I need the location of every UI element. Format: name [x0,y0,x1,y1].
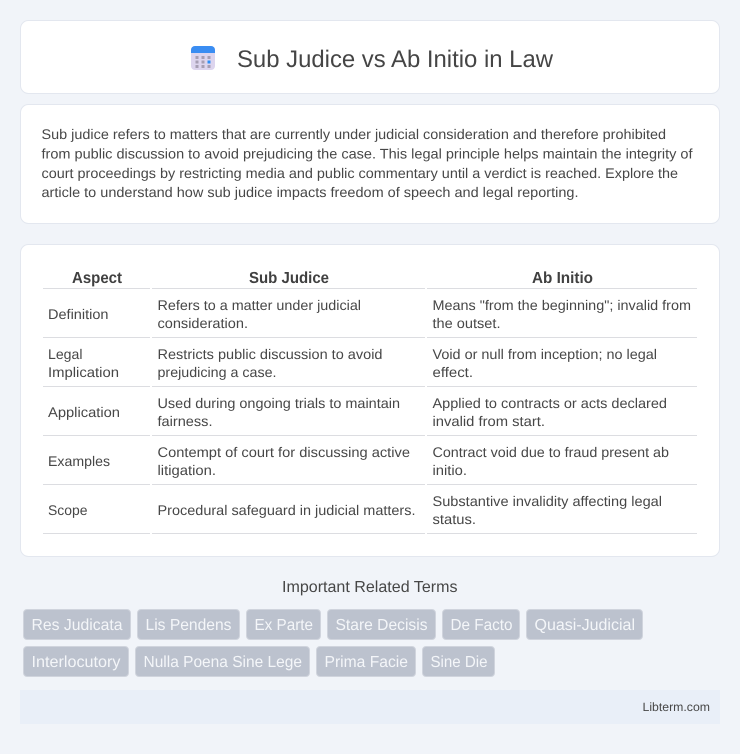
tags: related terms: Prima Facie [324,654,408,671]
table row: Legal Implication: Void or null from inception; no legal [432,346,657,362]
tags: related terms: Nulla Poena Sine Lege [144,654,302,671]
table row: Application: Application [48,404,120,420]
tags: related terms: Interlocutory [32,654,120,671]
table header row [43,270,697,289]
table row: Legal Implication: Restricts public discussion to avoid [158,346,382,362]
table row: Examples: initio. [432,462,467,478]
text block: description [42,126,693,200]
table header row: Aspect [72,270,123,287]
text block: description: court proceedings by restricting media and public commentary until a verdict is reached. Explore the [42,165,678,181]
table row: Definition [43,297,697,338]
table row: Examples: litigation. [158,462,216,478]
icon: calendar [191,46,215,70]
tags: related terms [24,610,642,676]
panel: description [20,104,720,224]
table row: Legal Implication: Legal [48,346,82,362]
tags: related terms: Quasi-Judicial [534,617,635,634]
table row: Scope: Procedural safeguard in judicial matters. [158,502,416,518]
table row: Legal Implication: prejudicing a case. [158,364,276,380]
table row: Examples [43,444,697,485]
table row: Definition: the outset. [432,315,500,331]
table row: Definition: Definition [48,306,108,322]
tags: related terms: De Facto [450,617,513,634]
table row: Examples: Contract void due to fraud present ab [432,444,669,460]
text block: description: from public discussion to avoid prejudicing the case. This legal principle helps maintain the integrity of [42,146,693,162]
footer [20,690,720,724]
table row: Legal Implication [43,346,697,387]
text block: description: Sub judice refers to matters that are currently under judicial consideration and therefore prohibited [42,126,666,142]
table row: Definition: Refers to a matter under judicial [158,297,361,313]
table row: Application: invalid from start. [432,413,545,429]
table row: Scope: Scope [48,502,88,518]
table row: Application [43,395,697,436]
table row: Examples: Examples [48,453,110,469]
table row: Examples: Contempt of court for discussing active [158,444,410,460]
title: Sub Judice vs Ab Initio in Law [237,46,554,73]
table row: Scope: status. [432,511,476,527]
tags: related terms: Res Judicata [32,617,123,634]
table row: Application: Used during ongoing trials to maintain [158,395,400,411]
tags: related terms: Ex Parte [254,617,313,634]
table row: Scope [43,493,697,534]
table header row: Ab Initio [532,270,593,287]
table header row: Sub Judice [249,270,329,287]
footer: Libterm.com [642,700,710,714]
table row: Application: fairness. [158,413,212,429]
table row: Legal Implication: Implication [48,364,119,380]
table row: Definition: Means "from the beginning"; invalid from [432,297,691,313]
text block: description: article to understand how sub judice impacts freedom of speech and legal reporting. [42,184,578,200]
table row: Legal Implication: effect. [432,364,473,380]
panel: header [20,20,720,94]
tags: related terms: Lis Pendens [146,617,232,634]
table row: Scope: Substantive invalidity affecting legal [432,493,662,509]
table row: Application: Applied to contracts or acts declared [432,395,667,411]
heading: related terms: Important Related Terms [282,579,458,596]
tags: related terms: Sine Die [430,654,488,671]
panel: comparison table [20,244,720,556]
tags: related terms: Stare Decisis [336,617,428,634]
table row: Definition: consideration. [158,315,248,331]
